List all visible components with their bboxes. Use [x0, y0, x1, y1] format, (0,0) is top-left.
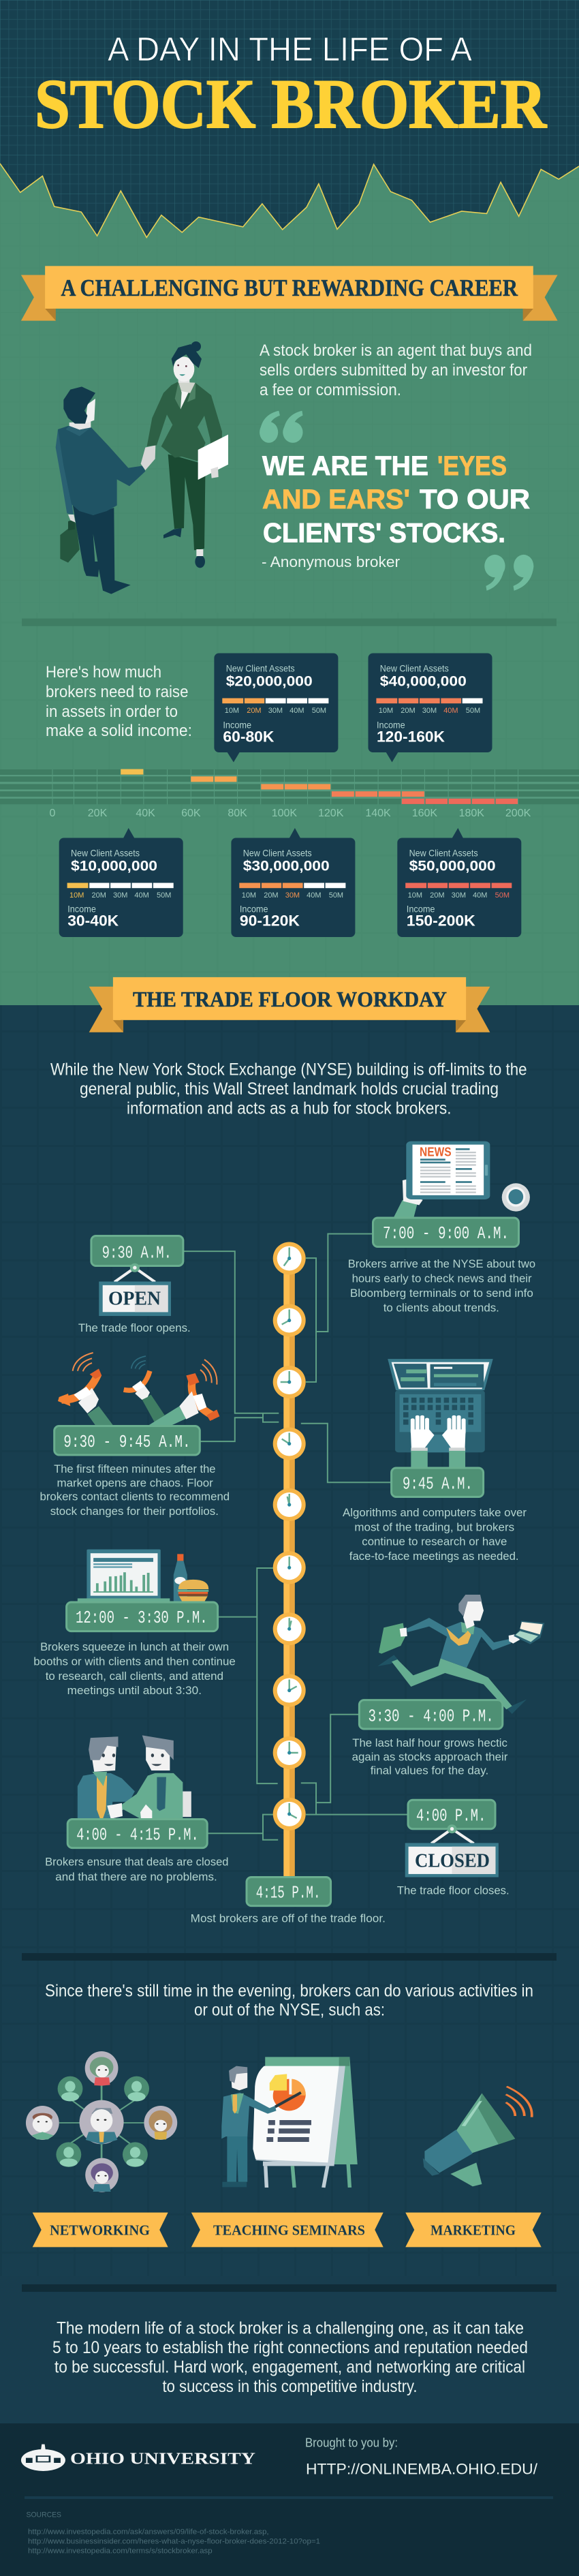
paragraph: conclusion: 5 to 10 years to establish the right connections and reputation needed [52, 2338, 528, 2357]
quote: TO OUR [420, 485, 530, 515]
clock 2 [273, 1304, 306, 1337]
time label: 9:45 A.M.: 9:45 A.M. [403, 1474, 473, 1494]
divider [22, 2284, 557, 2292]
callout: $50,000,000: $50,000,000 [409, 858, 496, 874]
stock line chart edge [0, 164, 579, 237]
paragraph: conclusion: to be successful. Hard work, engagement, and networking are critical [54, 2358, 525, 2377]
icon: hands holding phones [58, 1353, 219, 1426]
paragraph: conclusion: The modern life of a stock broker is a challenging one, as it can take [57, 2318, 524, 2337]
caption: last half hour [352, 1736, 508, 1777]
callout: $30,000,000: 10M [242, 891, 256, 900]
sources: SOURCES [26, 2511, 61, 2519]
callout: $40,000,000: 50M [466, 707, 480, 715]
callout: $50,000,000: 10M [408, 891, 422, 900]
callout: $30,000,000 [231, 828, 355, 937]
connectors: lower timeline [207, 1568, 408, 1840]
income chart: 160K [412, 808, 437, 819]
icon: tablet with news: NEWS [420, 1145, 452, 1159]
clock 1 [273, 1242, 306, 1274]
icon: closing quote mark [484, 555, 533, 591]
paragraph: evening activities [45, 1981, 533, 2019]
paragraph: conclusion: to success in this competitive industry. [162, 2377, 417, 2396]
caption: first fifteen minutes: stock changes for their portfolios. [50, 1505, 219, 1518]
callout: $10,000,000: $10,000,000 [71, 858, 157, 874]
caption: last half hour: again as stocks approach their [352, 1750, 508, 1763]
paragraph: evening activities: or out of the NYSE, such as: [194, 2000, 385, 2019]
caption: last half hour: final values for the day. [371, 1764, 488, 1777]
callout: $40,000,000: 20M [401, 707, 416, 715]
callout: $40,000,000: 10M [379, 707, 393, 715]
callout: $30,000,000: 50M [329, 891, 343, 900]
sources: http://www.investopedia.com/ask/answers/09/life-of-stock-broker.asp, [28, 2528, 269, 2536]
title: A DAY IN THE LIFE OF A [108, 31, 472, 68]
icon: tablet with news [393, 1141, 530, 1218]
callout: $50,000,000 [397, 828, 521, 937]
caption: trade floor opens: The trade floor opens. [78, 1321, 191, 1334]
sign: CLOSED [405, 1824, 499, 1877]
sign: OPEN: OPEN [108, 1288, 161, 1310]
ribbon heading: career: A CHALLENGING BUT REWARDING CAREER [61, 275, 518, 301]
income chart: 60K [181, 808, 201, 819]
callout: $50,000,000: Income [407, 904, 435, 915]
callout: $40,000,000: Income [377, 720, 405, 731]
income chart: 40K [136, 808, 155, 819]
caption: brokers arrive: hours early to check news and their [352, 1272, 532, 1285]
callout: $10,000,000: Income [67, 904, 96, 915]
intro paragraph [260, 341, 532, 399]
connectors: upper timeline [183, 1233, 392, 1482]
callout: $30,000,000: New Client Assets [243, 848, 312, 859]
time label: 7:00 - 9:00 A.M.: 7:00 - 9:00 A.M. [383, 1223, 509, 1244]
callout: $10,000,000: 40M [134, 891, 149, 900]
divider [22, 1953, 557, 1961]
ribbon label: teaching seminars [191, 2213, 384, 2247]
clock 10 [273, 1798, 306, 1830]
callout: $20,000,000: 10M [225, 707, 239, 715]
income chart: 80K [228, 808, 247, 819]
callout: $30,000,000: 30M [285, 891, 300, 900]
caption: algorithms: most of the trading, but brokers [354, 1520, 514, 1533]
paragraph: NYSE intro: information and acts as a hub for stock brokers. [127, 1099, 451, 1118]
time label: 4:15 P.M.: 4:15 P.M. [256, 1883, 320, 1903]
divider [22, 619, 557, 626]
time label: 9:45 A.M. [392, 1468, 484, 1497]
caption: lunch: booths or with clients and then continue [33, 1655, 236, 1668]
caption: brokers arrive: Bloomberg terminals or to send info [350, 1287, 533, 1300]
callout: $40,000,000: 120-160K [377, 728, 445, 746]
quote: 'EYES [437, 451, 507, 481]
caption: algorithms [343, 1506, 527, 1563]
callout: $20,000,000 [214, 653, 338, 762]
time label: 9:30 A.M. [91, 1236, 183, 1266]
caption: algorithms: face-to-face meetings as needed. [349, 1550, 519, 1563]
paragraph: NYSE intro [50, 1060, 527, 1118]
time label: 4:00 P.M. [408, 1800, 495, 1829]
ribbon heading: career [21, 266, 558, 321]
callout: $50,000,000: New Client Assets [409, 848, 478, 859]
caption: lunch: Brokers squeeze in lunch at their own [40, 1640, 229, 1653]
text: how much brokers need to raise: Here's how much [46, 663, 161, 681]
callout: $20,000,000: 40M [290, 707, 304, 715]
time label: 4:00 - 4:15 P.M.: 4:00 - 4:15 P.M. [76, 1824, 199, 1845]
ribbon label: marketing [405, 2213, 542, 2247]
clock 8 [273, 1674, 306, 1706]
icon: networking diagram [26, 2051, 177, 2192]
income chart [0, 769, 579, 819]
callout: $30,000,000: $30,000,000 [243, 858, 330, 874]
icon: laptop with typing hands [388, 1359, 493, 1469]
callout: $50,000,000: 40M [473, 891, 487, 900]
quote: WE ARE THE [262, 451, 428, 481]
sign: CLOSED: CLOSED [415, 1850, 490, 1872]
paragraph: evening activities: Since there's still time in the evening, brokers can do various activities in [45, 1981, 533, 2000]
quote [262, 451, 530, 549]
intro paragraph: A stock broker is an agent that buys and [260, 341, 532, 360]
callout: $20,000,000: Income [223, 720, 251, 731]
caption: lunch [33, 1640, 236, 1697]
caption: first fifteen minutes: The first fifteen minutes after the [54, 1462, 215, 1475]
logo: Ohio University: OHIO UNIVERSITY [70, 2451, 255, 2468]
callout: $30,000,000: 90-120K [240, 912, 300, 930]
callout: $40,000,000: 30M [422, 707, 437, 715]
quote: CLIENTS' STOCKS. [263, 519, 505, 549]
caption: lunch: meetings until about 3:30. [67, 1684, 202, 1697]
caption: lunch: to research, call clients, and attend [46, 1670, 223, 1683]
text: url: HTTP://ONLINEMBA.OHIO.EDU/ [306, 2461, 538, 2478]
callout: $30,000,000: Income [240, 904, 268, 915]
clock 3 [273, 1366, 306, 1398]
callout: $30,000,000: 20M [264, 891, 279, 900]
sign: OPEN [99, 1263, 171, 1316]
ribbon heading: trade floor workday [89, 977, 490, 1032]
sources: http://www.investopedia.com/terms/s/stockbroker.asp [28, 2547, 213, 2556]
time label: 7:00 - 9:00 A.M. [373, 1218, 519, 1247]
callout: $40,000,000 [368, 653, 492, 762]
time label: 9:30 A.M.: 9:30 A.M. [102, 1242, 172, 1263]
callout: $20,000,000: 20M [247, 707, 262, 715]
icon: two brokers shaking hands [78, 1735, 191, 1823]
icon: lunch at monitor [78, 1549, 208, 1603]
title [35, 31, 547, 143]
callout: $50,000,000: 30M [452, 891, 466, 900]
callout: $10,000,000: 10M [69, 891, 84, 900]
text: how much brokers need to raise: brokers need to raise [46, 683, 188, 701]
time label: 3:30 - 4:00 P.M. [359, 1700, 503, 1729]
time label: 4:15 P.M. [247, 1877, 331, 1906]
icon: teaching seminar flipchart [221, 2057, 358, 2188]
caption: off the trade floor: Most brokers are off of the trade floor. [191, 1912, 386, 1925]
paragraph: conclusion [52, 2318, 528, 2396]
timeline bar [283, 1261, 295, 1877]
caption: first fifteen minutes: market opens are chaos. Floor [57, 1477, 213, 1490]
background: green section [0, 164, 579, 1005]
callout: $10,000,000: 30M [113, 891, 127, 900]
callout: $10,000,000: 20M [91, 891, 106, 900]
text: how much brokers need to raise [46, 663, 192, 740]
clock 5 [273, 1488, 306, 1521]
time label: 4:00 - 4:15 P.M. [67, 1820, 207, 1848]
callout: $10,000,000: 50M [157, 891, 171, 900]
clock 6 [273, 1551, 306, 1584]
caption: brokers arrive [348, 1257, 535, 1314]
background: header grid [0, 0, 579, 232]
intro paragraph: a fee or commission. [260, 381, 401, 399]
caption: first fifteen minutes: brokers contact clients to recommend [40, 1490, 230, 1503]
callout: $50,000,000: 20M [430, 891, 445, 900]
time label: 9:30 - 9:45 A.M.: 9:30 - 9:45 A.M. [63, 1432, 191, 1452]
caption: deals closed: and that there are no problems. [55, 1870, 217, 1884]
callout: $50,000,000: 150-200K [407, 912, 475, 930]
caption: algorithms: Algorithms and computers take over [343, 1506, 527, 1519]
callout: $30,000,000: 40M [307, 891, 322, 900]
callout: $40,000,000: $40,000,000 [380, 673, 467, 689]
callout: $20,000,000: New Client Assets [226, 662, 295, 673]
income chart: 100K [272, 808, 297, 819]
divider [25, 2496, 553, 2499]
callout: $40,000,000: New Client Assets [380, 662, 449, 673]
caption: brokers arrive: to clients about trends. [384, 1302, 499, 1314]
income chart: 120K [318, 808, 344, 819]
income chart: 200K [505, 808, 531, 819]
sources [26, 2511, 320, 2556]
paragraph: NYSE intro: general public, this Wall Street landmark holds crucial trading [80, 1079, 499, 1099]
quote attribution: - Anonymous broker [262, 553, 400, 570]
sources: http://www.businessinsider.com/heres-what-a-nyse-floor-broker-does-2012-10?op=1 [28, 2537, 320, 2545]
caption: deals closed: Brokers ensure that deals are closed [45, 1856, 228, 1869]
income chart: 0 [50, 808, 56, 819]
caption: last half hour: The last half hour grows hectic [352, 1736, 507, 1749]
icon: megaphone [423, 2087, 532, 2186]
logo: Ohio University [21, 2444, 255, 2471]
callout: $20,000,000: 50M [312, 707, 326, 715]
time label: 3:30 - 4:00 P.M.: 3:30 - 4:00 P.M. [368, 1706, 494, 1726]
background: footer [0, 2423, 579, 2576]
callout: $10,000,000 [59, 828, 183, 937]
income chart: 20K [88, 808, 108, 819]
caption: deals closed [45, 1856, 228, 1884]
icon: running broker [377, 1595, 544, 1714]
time label: 12:00 - 3:30 P.M.: 12:00 - 3:30 P.M. [76, 1608, 208, 1628]
text: how much brokers need to raise: make a solid income: [46, 722, 192, 740]
ribbon label: networking: NETWORKING [50, 2222, 150, 2238]
paragraph: NYSE intro: While the New York Stock Exchange (NYSE) building is off-limits to the [50, 1060, 527, 1079]
caption: brokers arrive: Brokers arrive at the NYSE about two [348, 1257, 535, 1270]
callout: $10,000,000: New Client Assets [71, 848, 140, 859]
ribbon heading: trade floor workday: THE TRADE FLOOR WORKDAY [133, 987, 447, 1011]
ribbon label: marketing: MARKETING [431, 2222, 516, 2238]
time label: 12:00 - 3:30 P.M. [67, 1602, 218, 1631]
callout: $50,000,000: 50M [495, 891, 510, 900]
illustration: handshake between man and woman [56, 341, 228, 594]
income chart: 180K [459, 808, 484, 819]
quote: AND EARS' [262, 485, 410, 515]
icon: opening quote mark [260, 411, 303, 443]
clock 4 [273, 1427, 306, 1460]
caption: algorithms: continue to research or have [362, 1535, 507, 1548]
caption: trade floor closes: The trade floor closes. [397, 1884, 510, 1897]
callout: $20,000,000: 30M [268, 707, 283, 715]
clock 7 [273, 1612, 306, 1645]
callout: $20,000,000: $20,000,000 [226, 673, 313, 689]
caption: first fifteen minutes [40, 1462, 230, 1518]
time label: 9:30 - 9:45 A.M. [54, 1426, 200, 1455]
callout: $40,000,000: 40M [443, 707, 458, 715]
text: brought to you by: Brought to you by: [305, 2436, 398, 2450]
time label: 4:00 P.M.: 4:00 P.M. [416, 1805, 486, 1826]
intro paragraph: sells orders submitted by an investor for [260, 361, 527, 380]
ribbon label: networking [33, 2213, 168, 2247]
background: navy section grid [0, 1005, 579, 2276]
income chart: 140K [365, 808, 391, 819]
callout: $10,000,000: 30-40K [67, 912, 119, 930]
text: how much brokers need to raise: in assets in order to [46, 703, 178, 721]
ribbon label: teaching seminars: TEACHING SEMINARS [213, 2222, 365, 2238]
callout: $20,000,000: 60-80K [223, 728, 275, 746]
clock 9 [273, 1736, 306, 1769]
